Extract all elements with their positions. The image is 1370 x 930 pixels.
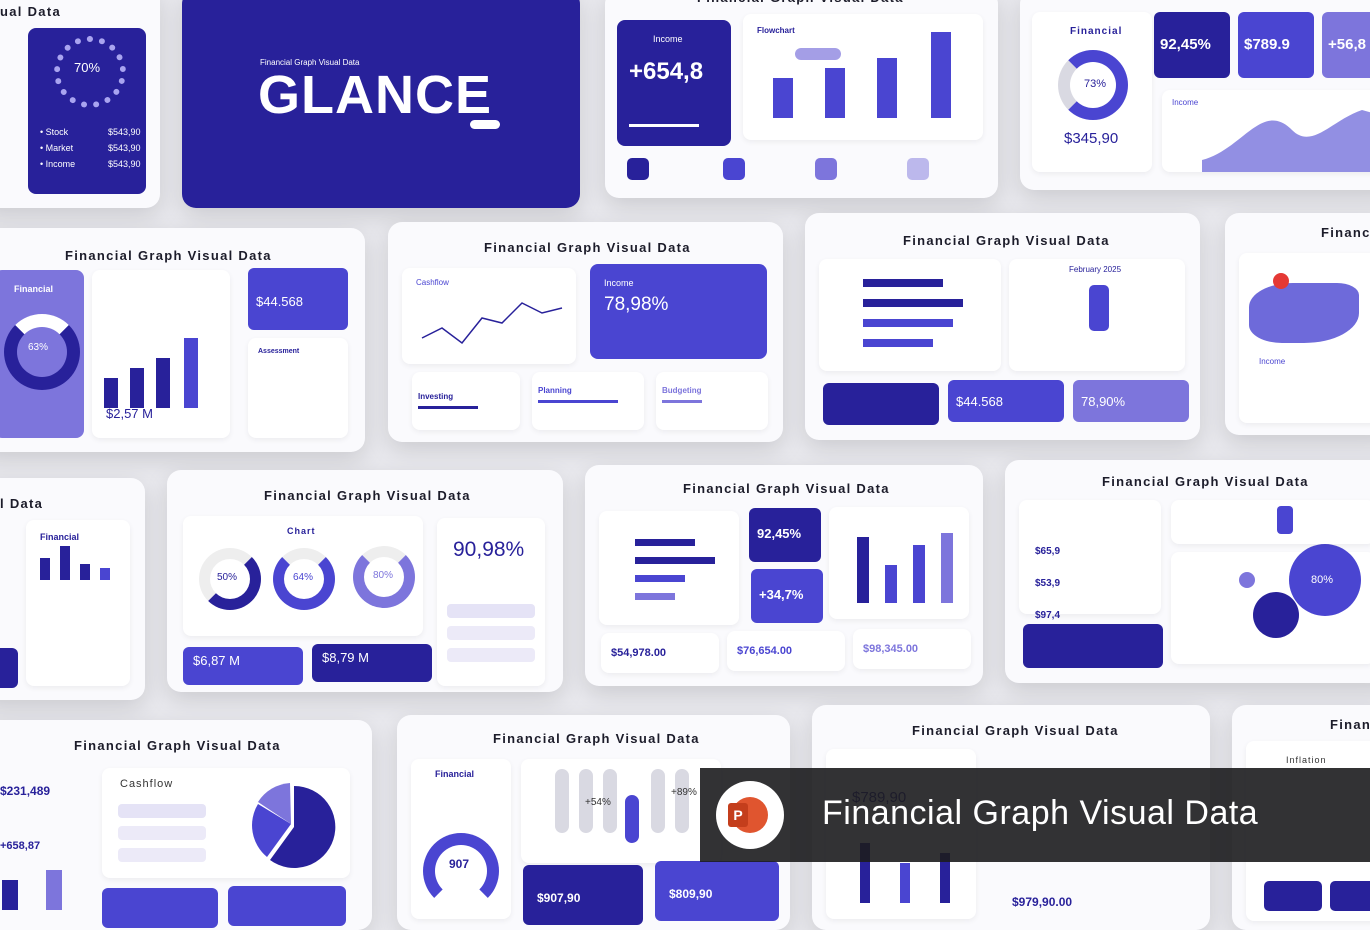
assessment list (248, 338, 348, 438)
card: profit row4: $979,90.00 (1012, 895, 1072, 909)
bubble chart (1171, 552, 1370, 664)
income tile: 78,98% (604, 294, 668, 315)
bar panel: Financial (40, 532, 79, 542)
card: income & flowchart (605, 0, 998, 198)
cashflow panel: Cashflow (120, 778, 173, 790)
banner: title bar (700, 768, 1370, 862)
tiles: 92,45% (757, 526, 801, 541)
balance tile: $44.568 (256, 294, 303, 309)
card: profit row4: $789,90 (852, 789, 906, 806)
card: cashflow row4 left (0, 720, 372, 930)
heading GLANCE: GLANCE (258, 65, 492, 125)
financial half donut panel: Financial (435, 769, 474, 779)
capsule chart: +89% (671, 787, 697, 798)
bar chart: $2,57 M (106, 406, 153, 421)
card: chartflow row4: $907,90 (537, 891, 580, 905)
map panel: Income (1259, 357, 1285, 366)
icon: powerpoint logo: P (733, 807, 743, 823)
bar panel (26, 520, 130, 686)
horizontal bar chart (819, 259, 1001, 371)
card: financial donut top-right: $789.9 (1244, 36, 1290, 53)
banner text: Financial Graph Visual Data (822, 794, 1258, 832)
card: chartflow row4: $809,90 (669, 887, 712, 901)
value tiles: $6,87 M (193, 653, 240, 668)
capsule chart (521, 759, 721, 863)
title: Financial Graph Visual Data (264, 488, 471, 503)
card: financial donut top-right (1020, 0, 1370, 190)
progress panels: Investing (418, 392, 453, 401)
financial half donut panel (411, 759, 511, 919)
sales row (601, 633, 719, 673)
card: cashflow row3: +34,7% (759, 587, 803, 602)
card: profit row4 (812, 705, 1210, 930)
chart: three donuts: 64% (293, 572, 313, 583)
panel: gauge 70%: 70% (74, 60, 100, 75)
title: Financial Graph Visual Data (74, 738, 281, 753)
card: cashflow row3 (585, 465, 983, 686)
card: GLANCE (182, 0, 580, 208)
bar chart (92, 270, 230, 438)
sales row: $54,978.00 (611, 647, 666, 659)
cashflow list (1019, 500, 1161, 614)
panel: gauge 70%: • Stock (40, 127, 68, 137)
capsule chart: +54% (585, 797, 611, 808)
card: cashflow line row2: Budgeting (662, 386, 702, 395)
card: inflation row4 right (1232, 705, 1370, 930)
panel: gauge 70% (28, 28, 146, 194)
cashflow list: $53,9 (1035, 578, 1060, 589)
card: bubbles row3 (1005, 460, 1370, 683)
balance tile (248, 268, 348, 330)
chart: area: Income (1172, 98, 1198, 107)
panel: income: Income (653, 34, 683, 44)
assessment list: Assessment (258, 348, 299, 355)
bubble chart: 80% (1311, 574, 1333, 586)
cashflow list: $65,9 (1035, 546, 1060, 557)
map panel (1239, 253, 1370, 423)
card: horizontal bars row2: 78,90% (1081, 394, 1125, 409)
title: Finan (1330, 717, 1370, 732)
card: chartflow row4 (397, 715, 790, 930)
line chart: Cashflow (416, 278, 449, 287)
investing panel (437, 518, 545, 686)
bottom tiles (823, 383, 939, 425)
panel: financial donut: $345,90 (1064, 130, 1118, 147)
panel: gauge 70%: • Income (40, 159, 75, 169)
card: cashflow row4 left: +658,87 (0, 840, 40, 852)
progress panels (412, 372, 520, 430)
card: cashflow row3: $98,345.00 (863, 643, 918, 655)
chart: three donuts: Chart (287, 526, 316, 536)
chart: three donuts (183, 516, 423, 636)
stat tiles (1154, 12, 1230, 78)
line chart (402, 268, 576, 364)
chart: area (1162, 90, 1370, 172)
title: Financial Graph Visual Data (912, 723, 1119, 738)
chart: flowchart bars (743, 14, 983, 140)
card: donuts row3 (167, 470, 563, 692)
panel: income: +654,8 (629, 58, 703, 85)
title: Financ (1321, 225, 1370, 240)
icon: powerpoint logo (716, 781, 784, 849)
panel: donut 63%: Financial (14, 284, 53, 294)
stat tiles: 92,45% (1160, 36, 1211, 53)
cashflow panel (102, 768, 350, 878)
title: Financial Graph Visual Data (65, 248, 272, 263)
financial half donut panel: 907 (449, 857, 469, 871)
value tiles (183, 647, 303, 685)
card: actual data top-left (0, 0, 160, 208)
card: cashflow line row2: Planning (538, 386, 572, 395)
panel: income (617, 20, 731, 146)
row of small stat icons (627, 158, 929, 180)
title: Financial Graph Visual Data (1102, 474, 1309, 489)
title: Financial Graph Visual Data (683, 481, 890, 496)
card: horizontal bars row2: $44.568 (956, 394, 1003, 409)
income tile: Income (604, 278, 634, 288)
horizontal bars (599, 511, 739, 625)
title: Financial Graph Visual Data (493, 731, 700, 746)
panel: gauge 70%: $543,90 (108, 127, 141, 137)
card: cashflow line row2 (388, 222, 783, 442)
title: l Data (0, 496, 43, 511)
card: cashflow row4 left: $231,489 (0, 784, 50, 798)
chart: flowchart bars: Flowchart (757, 26, 795, 35)
card: horizontal bars row2 (805, 213, 1200, 440)
subtitle: Financial Graph Visual Data (260, 58, 359, 67)
investing panel: 90,98% (453, 538, 524, 561)
card: bubbles row3: $97,4 (1035, 610, 1060, 621)
card: financial left row3 (0, 478, 145, 700)
card: financial left row2 (0, 228, 365, 452)
panel: gauge 70%: $543,90 (108, 143, 141, 153)
button (470, 120, 500, 129)
panel: gauge 70%: • Market (40, 143, 73, 153)
card: financial donut top-right: +56,8 (1328, 36, 1366, 53)
panel: donut 63%: 63% (28, 342, 48, 353)
title: Financial Graph Visual Data (484, 240, 691, 255)
financial tile (1023, 624, 1163, 668)
tiles (749, 508, 821, 562)
vertical bar chart (829, 507, 969, 619)
panel: donut 63% (0, 270, 84, 438)
card: cashflow row3: $76,654.00 (737, 645, 792, 657)
panel: financial donut: Financial (1070, 26, 1122, 37)
panel: gauge 70%: $543,90 (108, 159, 141, 169)
panel: financial donut: 73% (1084, 78, 1106, 90)
income tile (590, 264, 767, 359)
card: donuts row3: $8,79 M (322, 650, 369, 665)
title: Financial Graph Visual Data (903, 233, 1110, 248)
title: ual Data (0, 4, 61, 19)
card: map right row2 (1225, 213, 1370, 435)
card: inflation row4 right: Inflation (1286, 755, 1327, 765)
chart: three donuts: 50% (217, 572, 237, 583)
calendar (1009, 259, 1185, 371)
calendar: February 2025 (1069, 265, 1121, 274)
chart: three donuts: 80% (373, 570, 393, 581)
panel: financial donut (1032, 12, 1152, 172)
